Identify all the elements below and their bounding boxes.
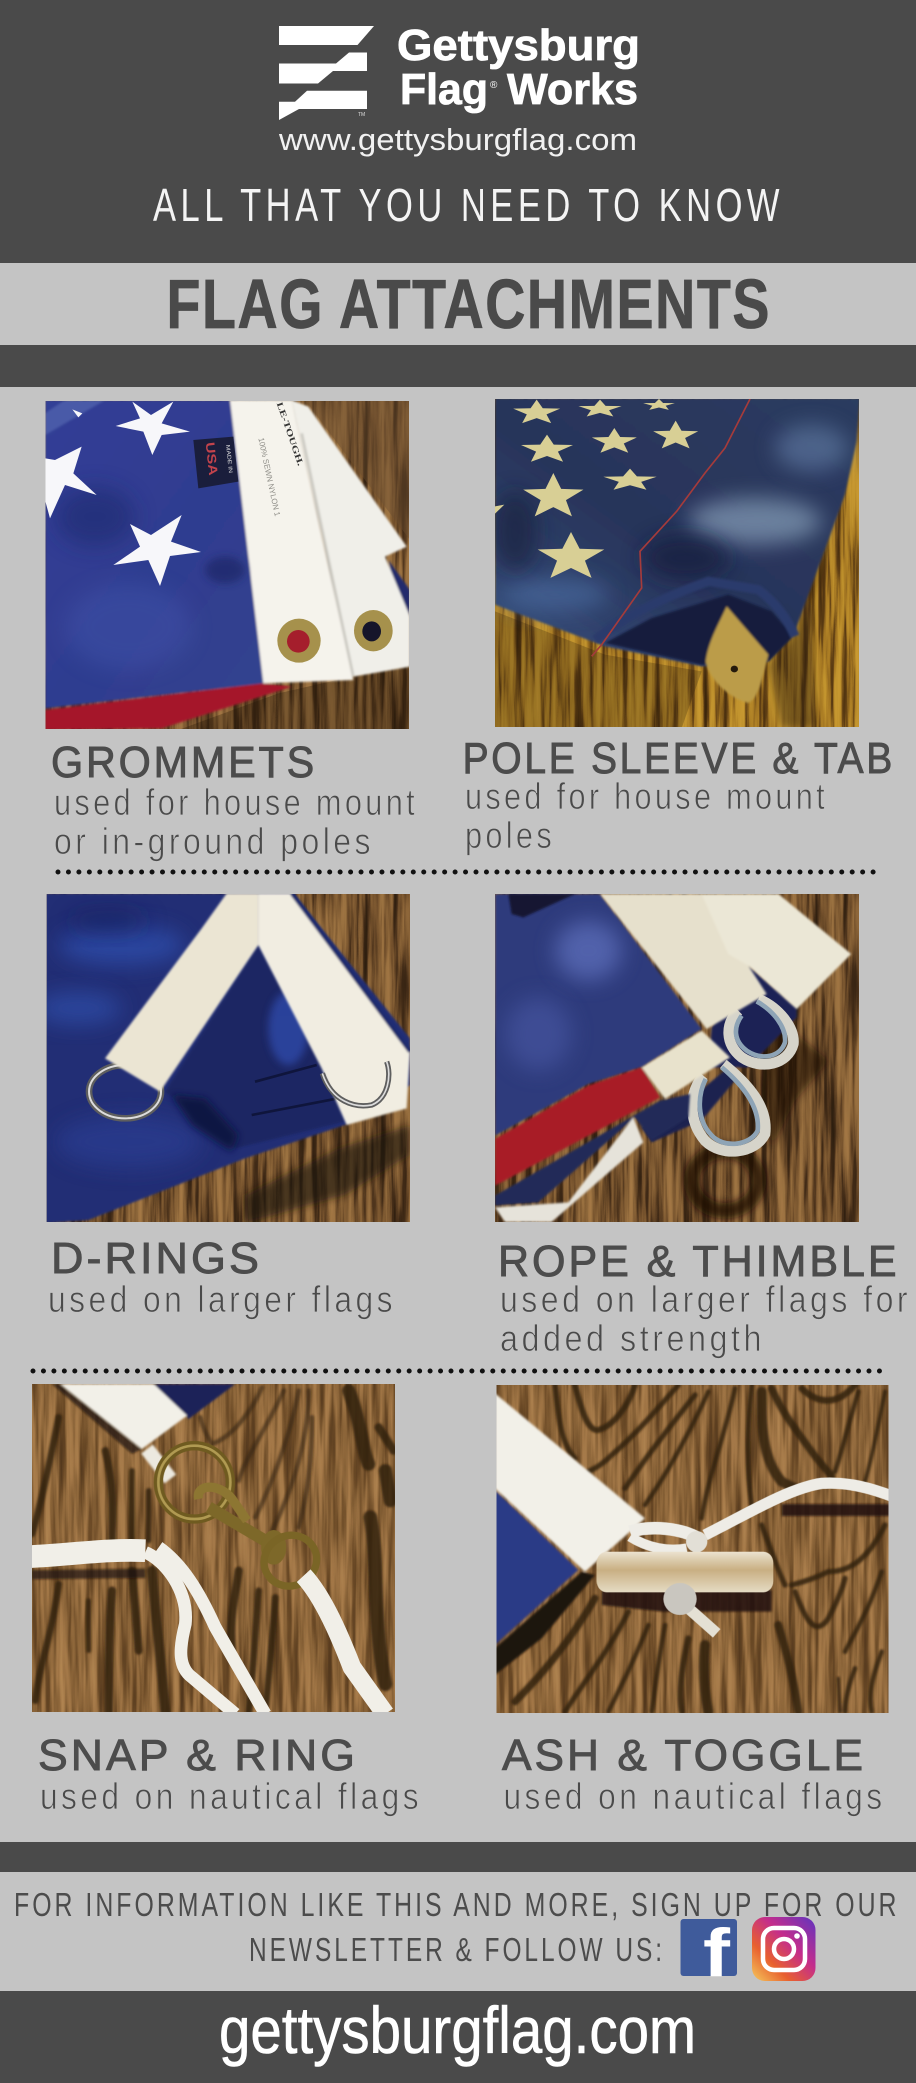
- thimble lower: [692, 1064, 765, 1151]
- thimble upper: [692, 999, 793, 1151]
- photo: grommets: USA: [203, 442, 220, 476]
- ring right: [322, 1062, 389, 1106]
- newsletter text: [14, 1886, 900, 1968]
- newsletter panel: [0, 1872, 916, 1991]
- toggle: [597, 1552, 773, 1592]
- description: or in-ground poles: [54, 821, 374, 862]
- icon: logo mark: TM: [358, 112, 365, 118]
- panel: d-rings: [35, 893, 410, 1320]
- panel: rope and thimble: [495, 894, 911, 1359]
- footer panel: [0, 1991, 916, 2083]
- label: GROMMETS: [51, 738, 317, 787]
- icon: logo mark: [279, 26, 374, 120]
- photo: grommets: 100% SEWN NYLON 1: [256, 437, 282, 518]
- description: used for house mount: [465, 776, 828, 817]
- ring left: [89, 1065, 161, 1118]
- wood grain: [515, 1385, 885, 1712]
- photo: snap and ring: [32, 1384, 395, 1712]
- logo wordmark: Gettysburg: [397, 21, 640, 70]
- label: ASH & TOGGLE: [502, 1731, 866, 1780]
- grommet left: [277, 619, 321, 663]
- panel: pole sleeve and tab: [463, 398, 895, 856]
- label: SNAP & RING: [38, 1731, 358, 1780]
- icon: facebook: f: [703, 1915, 730, 1991]
- divider: [58, 870, 874, 874]
- sleeve print: LE-TOUGH.: [275, 401, 306, 467]
- description: [54, 782, 418, 862]
- description: used on larger flags: [48, 1279, 396, 1320]
- logo wordmark: ®: [490, 80, 498, 91]
- footer url: gettysburgflag.com: [219, 1993, 696, 2067]
- logo wordmark: Flag: [400, 65, 488, 114]
- rope: [630, 1483, 893, 1550]
- description: [500, 1279, 911, 1359]
- lower ring: [255, 1526, 326, 1596]
- dark band above footer: [0, 1842, 916, 1872]
- sewn label: [193, 437, 238, 488]
- label: D-RINGS: [51, 1234, 262, 1283]
- grommet right: [354, 610, 393, 651]
- snap hook: [209, 1507, 265, 1541]
- label: ROPE & THIMBLE: [498, 1237, 900, 1286]
- title band: [0, 263, 916, 345]
- panel: grommets: [45, 400, 418, 862]
- photo: grommets: MADE IN: [224, 445, 233, 473]
- description: used for house mount: [54, 782, 418, 823]
- dark band under title: [0, 345, 916, 387]
- icon: instagram: [752, 1917, 816, 1981]
- description: added strength: [500, 1318, 765, 1359]
- logo wordmark: [397, 21, 640, 114]
- wood grain: [32, 1387, 394, 1712]
- ring: [158, 1446, 326, 1596]
- panel: ash and toggle: [495, 1385, 893, 1817]
- newsletter text: NEWSLETTER & FOLLOW US:: [249, 1931, 665, 1968]
- photo: ash and toggle: [496, 1385, 888, 1713]
- photo: grommets: [46, 401, 409, 729]
- rope: [29, 1547, 385, 1714]
- website url: www.gettysburgflag.com: [278, 122, 637, 157]
- icon: facebook: [680, 1915, 737, 1991]
- description: [465, 776, 828, 856]
- description: poles: [465, 815, 555, 856]
- knot: [663, 1583, 717, 1633]
- photo: d-rings: [46, 894, 410, 1222]
- photo: pole sleeve: [495, 399, 859, 727]
- photo: rope and thimble: [495, 894, 859, 1222]
- divider: [33, 1368, 880, 1374]
- header panel: [0, 0, 916, 263]
- panel: snap and ring: [29, 1384, 422, 1817]
- description: used on nautical flags: [40, 1776, 422, 1817]
- logo wordmark: Works: [507, 65, 638, 114]
- title: FLAG ATTACHMENTS: [166, 265, 771, 343]
